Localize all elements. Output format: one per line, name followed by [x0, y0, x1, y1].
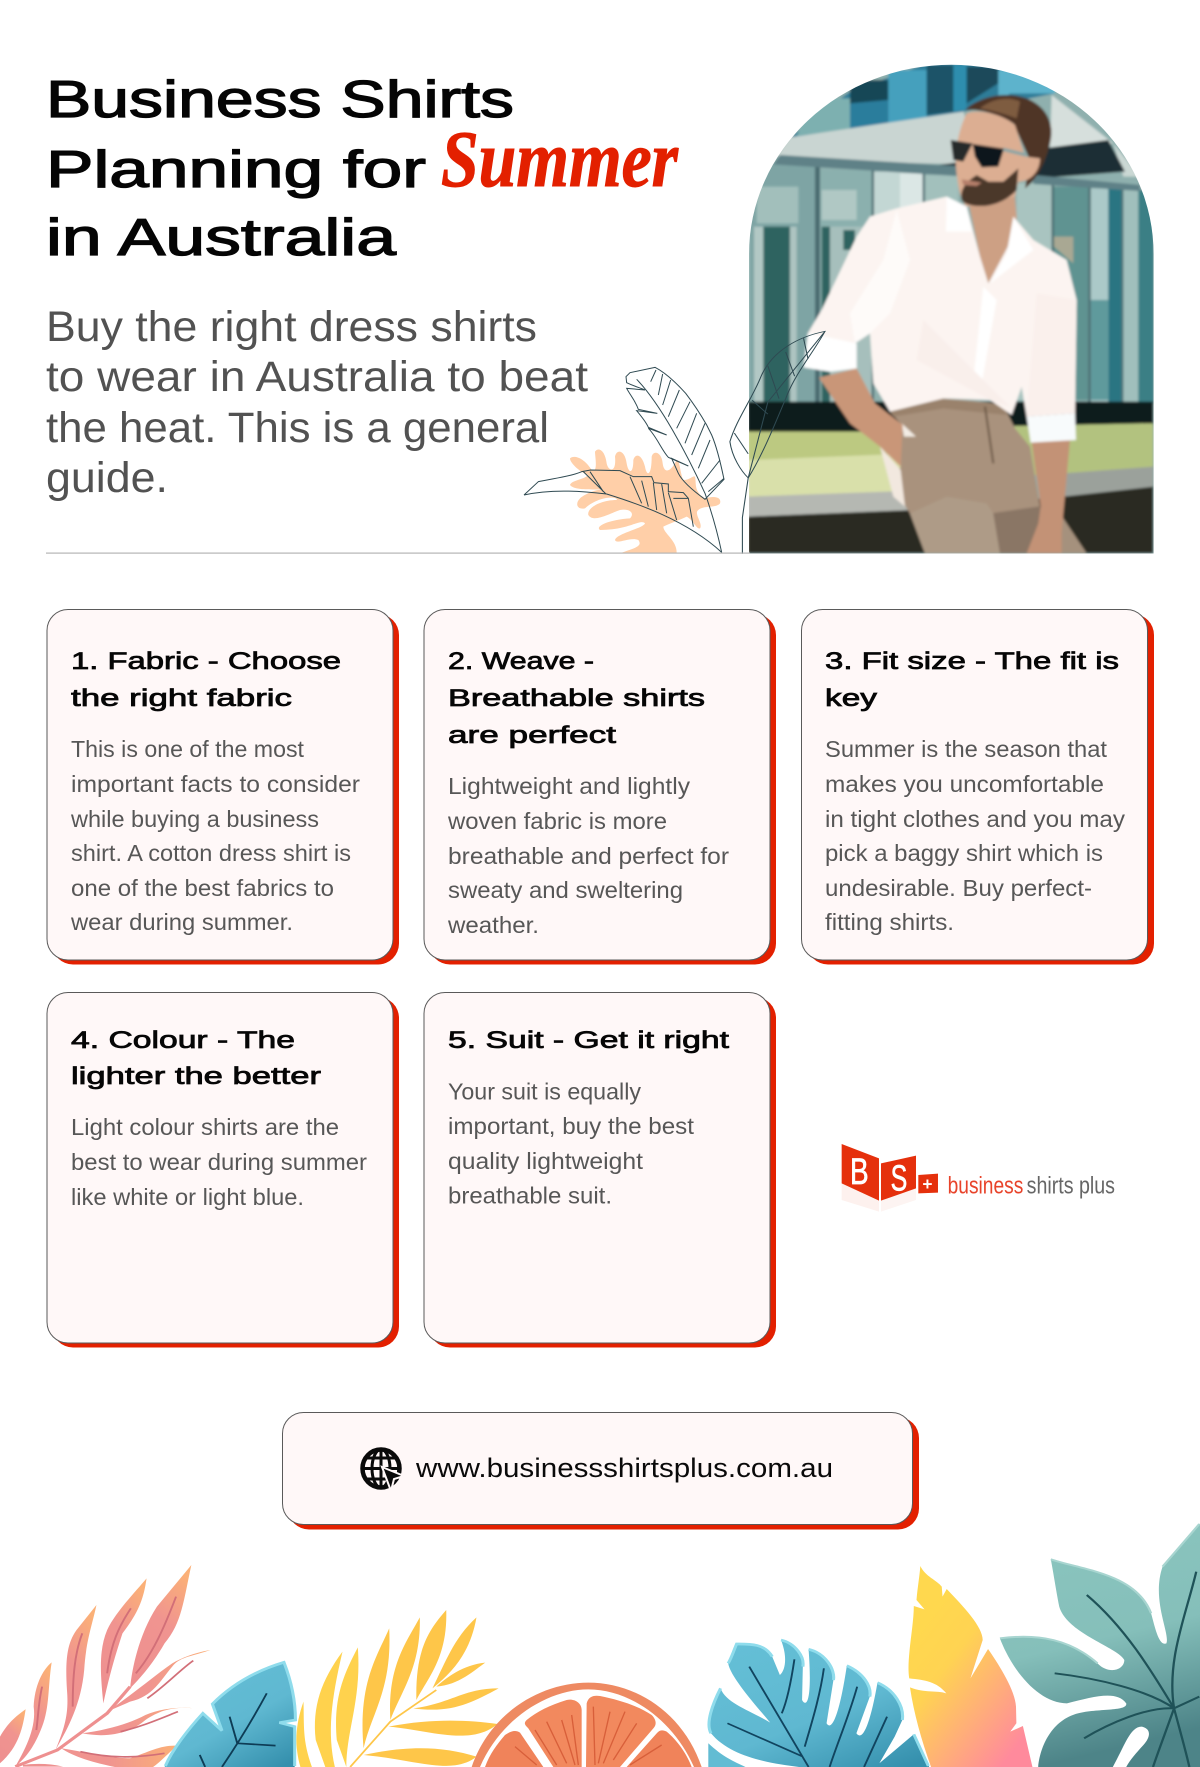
card 1 text: This is one of the most: [71, 736, 304, 762]
dark plinth: [748, 402, 1153, 433]
card 4 heading: lighter the better: [71, 1063, 321, 1090]
logo: business shirts plus: S: [891, 1158, 907, 1199]
line art palm leaves: [524, 367, 724, 552]
sunglasses: [951, 140, 973, 162]
tropical leaves: yellow pink banana leaf: [908, 1566, 1032, 1767]
card 2: weave: [424, 610, 776, 964]
title: Business Shirts: [46, 71, 514, 129]
card 1 text: important facts to consider: [71, 771, 360, 797]
card 3 text: undesirable. Buy perfect-: [825, 875, 1092, 901]
card 3 text: Summer is the season that: [825, 736, 1107, 762]
website pill: [282, 1412, 919, 1530]
hero photo: man in white shirt: [748, 63, 1155, 555]
neck: [968, 196, 1018, 282]
left forearm: [819, 368, 903, 467]
logo: business shirts plus: [842, 1144, 1115, 1212]
subtitle: [46, 303, 588, 502]
card 1 text: shirt. A cotton dress shirt is: [71, 840, 351, 866]
title: [46, 71, 679, 267]
card 3 heading: [825, 648, 1119, 712]
card 1: fabric: [47, 610, 399, 964]
card 1 heading: [71, 648, 341, 712]
card 3 text: [825, 736, 1125, 935]
logo: business shirts plus: +: [922, 1174, 932, 1194]
subtitle: the heat. This is a general: [46, 404, 549, 452]
subtitle: guide.: [46, 454, 168, 502]
card 2 heading: 2. Weave -: [448, 648, 594, 675]
tall line art leaf: [730, 331, 825, 554]
logo: business shirts plus: B: [850, 1150, 869, 1192]
card 5 text: important, buy the best: [448, 1113, 694, 1139]
card 5 text: [448, 1078, 694, 1208]
lawn: [749, 428, 882, 461]
card 2 text: sweaty and sweltering: [448, 877, 683, 903]
glass upper storey: [790, 63, 1055, 138]
icon: globe with cursor: [362, 1450, 404, 1491]
card 1 text: wear during summer.: [70, 909, 293, 935]
tropical leaves: orange slice: [472, 1683, 702, 1767]
ledge: [748, 491, 913, 517]
hair: [965, 95, 1051, 188]
logo: business shirts plus: business: [948, 1172, 1023, 1199]
divider: [46, 552, 750, 554]
card 1 text: one of the best fabrics to: [71, 875, 334, 901]
card 3: fit size: [802, 610, 1154, 964]
card 3 text: fitting shirts.: [825, 909, 954, 935]
card 2 text: woven fabric is more: [447, 808, 667, 834]
card 2 heading: [448, 648, 705, 749]
card 3 text: pick a baggy shirt which is: [825, 840, 1103, 866]
card 4 text: Light colour shirts are the: [71, 1114, 339, 1140]
card 2 heading: Breathable shirts: [448, 685, 705, 712]
card 5 text: quality lightweight: [448, 1148, 643, 1174]
concrete band: [777, 112, 970, 164]
subtitle: to wear in Australia to beat: [46, 353, 588, 401]
card 3 text: in tight clothes and you may: [825, 806, 1125, 832]
right forearm: [1027, 440, 1070, 553]
website address: www.businessshirtsplus.com.au: [415, 1453, 833, 1483]
card 2 heading: are perfect: [448, 722, 616, 749]
title: Planning for: [46, 141, 426, 199]
card 4 text: [71, 1114, 367, 1210]
card 2 text: Lightweight and lightly: [448, 773, 690, 799]
trousers: [1060, 513, 1087, 553]
card 4 text: like white or light blue.: [71, 1184, 304, 1210]
logo: business shirts plus: shirts plus: [1027, 1172, 1115, 1199]
card 5 text: Your suit is equally: [448, 1078, 641, 1104]
soffit: [927, 140, 1125, 178]
card 2 text: weather.: [447, 912, 539, 938]
tropical leaves: teal leaf: [1000, 1523, 1200, 1767]
card 5 text: breathable suit.: [448, 1182, 612, 1208]
tropical leaves: yellow frond: [296, 1610, 499, 1767]
card 2 text: breathable and perfect for: [448, 843, 729, 869]
card 4 text: best to wear during summer: [71, 1149, 367, 1175]
shirt: [804, 197, 1077, 417]
tropical leaves: blue leaf: [165, 1662, 295, 1767]
card 5 heading: 5. Suit - Get it right: [448, 1027, 729, 1054]
tropical leaves: monstera: [708, 1640, 929, 1767]
subtitle: Buy the right dress shirts: [46, 303, 537, 351]
card 3 heading: key: [825, 685, 877, 712]
glass wall: [750, 163, 815, 407]
title: in Australia: [46, 209, 396, 267]
decorative peach leaf: [570, 449, 720, 553]
card 5: suit: [424, 992, 776, 1348]
card 1 text: while buying a business: [70, 806, 319, 832]
card 1 text: [70, 736, 360, 935]
face: [956, 112, 1040, 207]
card 2 text: [447, 773, 729, 938]
card 4: colour: [47, 992, 399, 1348]
title accent word: Summer: [441, 116, 679, 204]
card 1 heading: 1. Fabric - Choose: [71, 648, 341, 675]
tropical leaves: pink frond: [0, 1565, 210, 1767]
card 4 heading: 4. Colour - The: [71, 1027, 295, 1054]
card 3 heading: 3. Fit size - The fit is: [825, 648, 1119, 675]
card 1 heading: the right fabric: [71, 685, 292, 712]
card 4 heading: [71, 1027, 321, 1090]
card 3 text: makes you uncomfortable: [825, 771, 1104, 797]
